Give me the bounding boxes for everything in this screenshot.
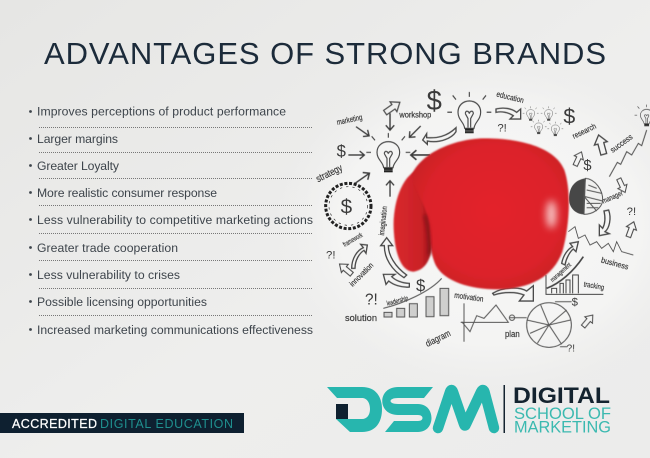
item: communications effectiveness: Increased marketing communications effectiveness xyxy=(37,323,313,337)
logo letter D xyxy=(327,387,382,432)
doodle chart: pie with dark slice xyxy=(569,178,603,214)
doodle labels: imagination xyxy=(377,206,389,236)
doodle labels: business xyxy=(600,256,630,272)
doodle arrows xyxy=(336,97,639,330)
item: crises: Less vulnerability to crises xyxy=(37,268,180,282)
doodle labels: research xyxy=(571,122,598,141)
bullet list of advantages xyxy=(29,104,313,337)
doodle dollar signs and question marks: $ xyxy=(416,276,425,295)
doodle labels: plan xyxy=(505,329,520,339)
doodle labels: management xyxy=(549,262,573,284)
doodle labels: strategy xyxy=(314,163,344,185)
accreditation banner xyxy=(0,413,244,433)
doodle labels: motivation xyxy=(454,291,484,304)
logo letter S xyxy=(382,387,433,432)
item: licensing: Possible licensing opportunities xyxy=(37,295,207,309)
doodle labels: framework xyxy=(342,232,364,249)
doodle chart: rising bars xyxy=(383,278,449,317)
logo wordmark: SCHOOL OF xyxy=(514,405,611,423)
doodle labels: diagram xyxy=(424,328,452,349)
doodle dollar signs and question marks: ?! xyxy=(497,123,507,135)
logo wordmark: MARKETING xyxy=(514,418,611,436)
accreditation banner: DIGITAL EDUCATION xyxy=(100,417,233,431)
doodle dollar signs and question marks: ?! xyxy=(567,344,575,355)
doodle chart: management bars xyxy=(546,257,603,294)
item: competitive marketing actions: Less vulnerability to competitive marketing actions xyxy=(37,213,313,227)
logo letter M xyxy=(438,390,494,428)
doodle chart: diagram line xyxy=(461,303,508,342)
doodle lightbulbs xyxy=(366,92,650,171)
doodle dollar signs and question marks: $ xyxy=(583,158,591,174)
item: consumer response: More realistic consumer response xyxy=(37,186,217,200)
doodle labels: manager xyxy=(600,188,625,205)
doodle labels xyxy=(314,90,634,349)
glove thumb xyxy=(394,170,432,272)
glove body xyxy=(412,138,569,289)
logo wordmark xyxy=(513,383,611,436)
illustration: doodles and boxing glove xyxy=(314,85,650,355)
doodle people ring around dollar sign: $ xyxy=(341,195,353,218)
glove crease shadow xyxy=(425,215,429,255)
doodle dollar signs and question marks: ?! xyxy=(627,206,636,218)
item: greater loyalty: Greater Loyalty xyxy=(37,159,120,173)
doodle labels: success xyxy=(609,132,634,155)
boxing glove xyxy=(394,138,569,289)
doodle labels: solution xyxy=(345,313,377,323)
doodle chart: success trend line xyxy=(609,130,647,177)
doodle dollar signs and question marks: $ xyxy=(337,142,346,161)
doodle chart: business line xyxy=(568,227,633,255)
doodle dollar signs and question marks xyxy=(326,85,636,355)
logo navy square xyxy=(336,404,348,419)
doodle people ring around dollar sign xyxy=(326,183,371,229)
doodle dollar signs and question marks: $ xyxy=(563,104,575,128)
doodle labels: tracking xyxy=(583,279,605,292)
doodle dollar signs and question marks: ?! xyxy=(326,249,335,261)
title: ADVANTAGES OF STRONG BRANDS xyxy=(44,36,606,71)
doodle labels: education xyxy=(496,90,525,105)
accreditation banner: ACCREDITED xyxy=(12,417,97,431)
doodle dollar signs and question marks: $ xyxy=(572,297,579,309)
doodle labels: leadership xyxy=(386,295,409,308)
doodle dollar signs and question marks: $ xyxy=(427,85,442,116)
logo divider xyxy=(504,385,505,433)
doodle labels: innovation xyxy=(348,261,375,288)
doodle chart: large pie xyxy=(509,302,572,347)
doodle dollar signs and question marks: ?! xyxy=(365,291,378,308)
logo wordmark: DIGITAL xyxy=(513,383,610,408)
doodle labels: marketing xyxy=(336,113,363,127)
item: trade cooperation: Greater trade cooperation xyxy=(37,241,178,255)
item: larger margins: Larger margins xyxy=(37,132,118,146)
DSM logo xyxy=(327,383,611,436)
doodle labels: workshop xyxy=(398,111,432,120)
item: product performance: Improves perceptions of product performance xyxy=(37,104,286,118)
glove highlight xyxy=(546,200,556,228)
